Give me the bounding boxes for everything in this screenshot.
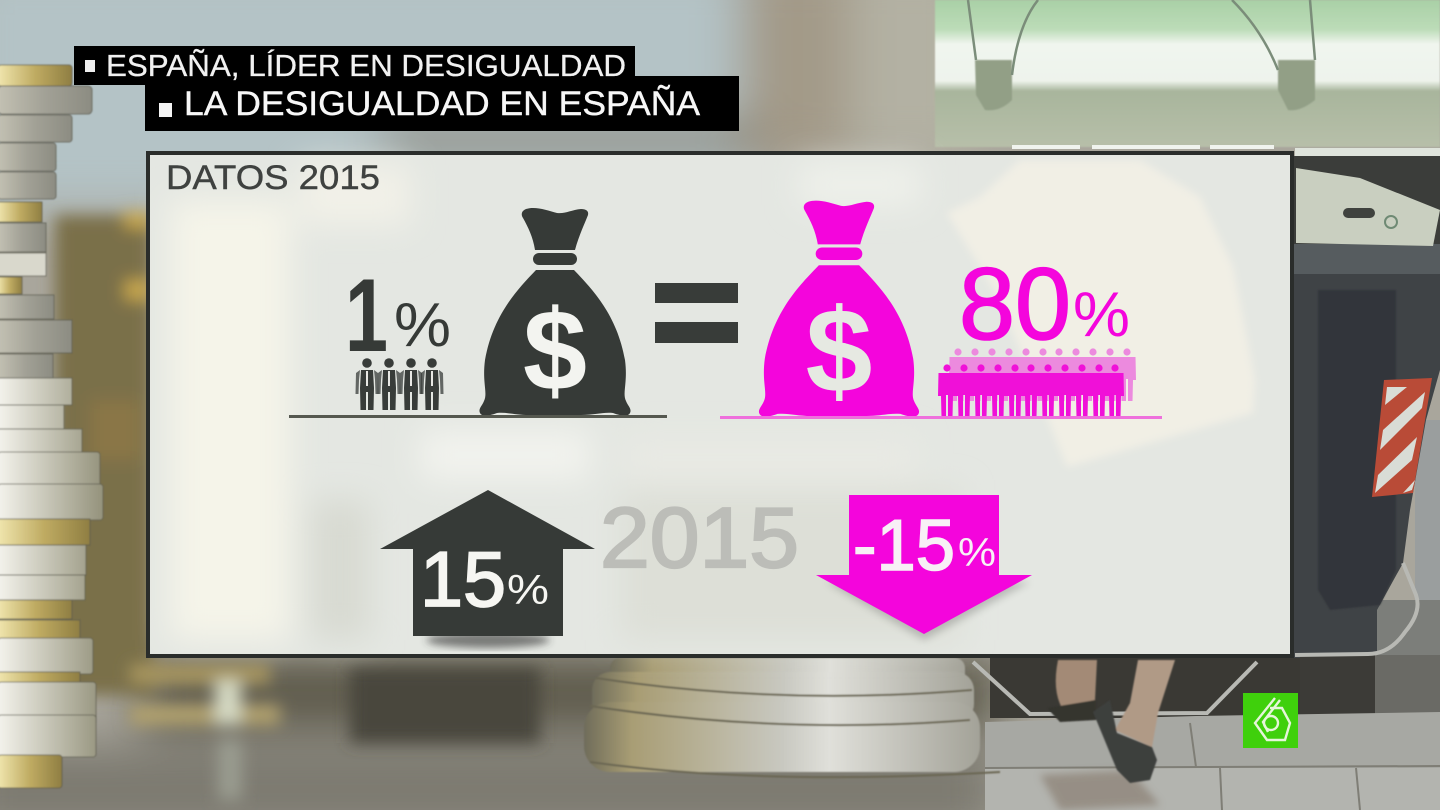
background: wall tones bbox=[0, 0, 1000, 810]
arrow: up 15%: 15 bbox=[420, 535, 506, 623]
arrow: down -15%: -15 bbox=[853, 506, 955, 586]
icon: dark money bag bbox=[479, 208, 631, 416]
background: recycling bin lid bbox=[935, 0, 1440, 157]
label: year 2015: 2015 bbox=[600, 491, 799, 586]
panel: photo tones showing through bbox=[170, 165, 960, 640]
background: woman's legs and shoes bbox=[1047, 660, 1175, 783]
stat: 80% bbox=[959, 247, 1130, 361]
crowd: back row bbox=[949, 348, 1136, 401]
background: left coin stack bbox=[0, 65, 103, 788]
stat: 80%: % bbox=[1073, 280, 1130, 350]
heading: front title bar: LA DESIGUALDAD EN ESPAÑA bbox=[184, 85, 700, 123]
background: pavement bbox=[985, 712, 1440, 810]
background: central coin stack bbox=[584, 658, 1000, 777]
icon: magenta money bag: $ bbox=[806, 284, 872, 418]
icon: dark money bag: $ bbox=[523, 287, 587, 415]
icon: magenta money bag bbox=[759, 201, 919, 418]
stat: 1% bbox=[345, 258, 451, 374]
background: blurred golden coin stack bbox=[55, 212, 155, 695]
background: cardboard box in bin bbox=[1296, 168, 1440, 246]
background: striped reflector bbox=[1372, 378, 1432, 497]
arrow: up 15% bbox=[380, 490, 595, 648]
divider line: right baseline bbox=[720, 416, 1162, 419]
heading: front title bar bbox=[145, 76, 739, 131]
arrow: down -15% bbox=[816, 495, 1032, 640]
panel: woman silhouette showing through bbox=[947, 160, 1255, 467]
stat: 1%: % bbox=[394, 291, 451, 360]
background: blurred distant coin highlights bbox=[130, 664, 540, 800]
icon: equals sign bbox=[655, 283, 738, 343]
stat: 1%: 1 bbox=[345, 258, 388, 374]
background: bin cart frame bbox=[973, 563, 1418, 714]
background: dark bin body bbox=[1294, 156, 1440, 720]
stat: 80%: 80 bbox=[959, 247, 1071, 361]
label: data year: DATOS 2015 bbox=[166, 159, 380, 197]
arrow: up 15%: % bbox=[507, 566, 549, 613]
background: ground behind the bin bbox=[990, 655, 1440, 718]
arrow: down -15%: % bbox=[958, 531, 996, 575]
divider line: left baseline bbox=[289, 415, 667, 418]
crowd: front row bbox=[938, 364, 1124, 417]
icon: crowd of people bbox=[938, 348, 1136, 417]
icon: four men in suits bbox=[356, 358, 444, 410]
heading: back title bar: ESPAÑA, LÍDER EN DESIGUALDAD bbox=[106, 48, 626, 83]
icon: channel logo laSexta bbox=[1243, 693, 1298, 748]
panel: translucent data panel bbox=[148, 153, 1292, 656]
